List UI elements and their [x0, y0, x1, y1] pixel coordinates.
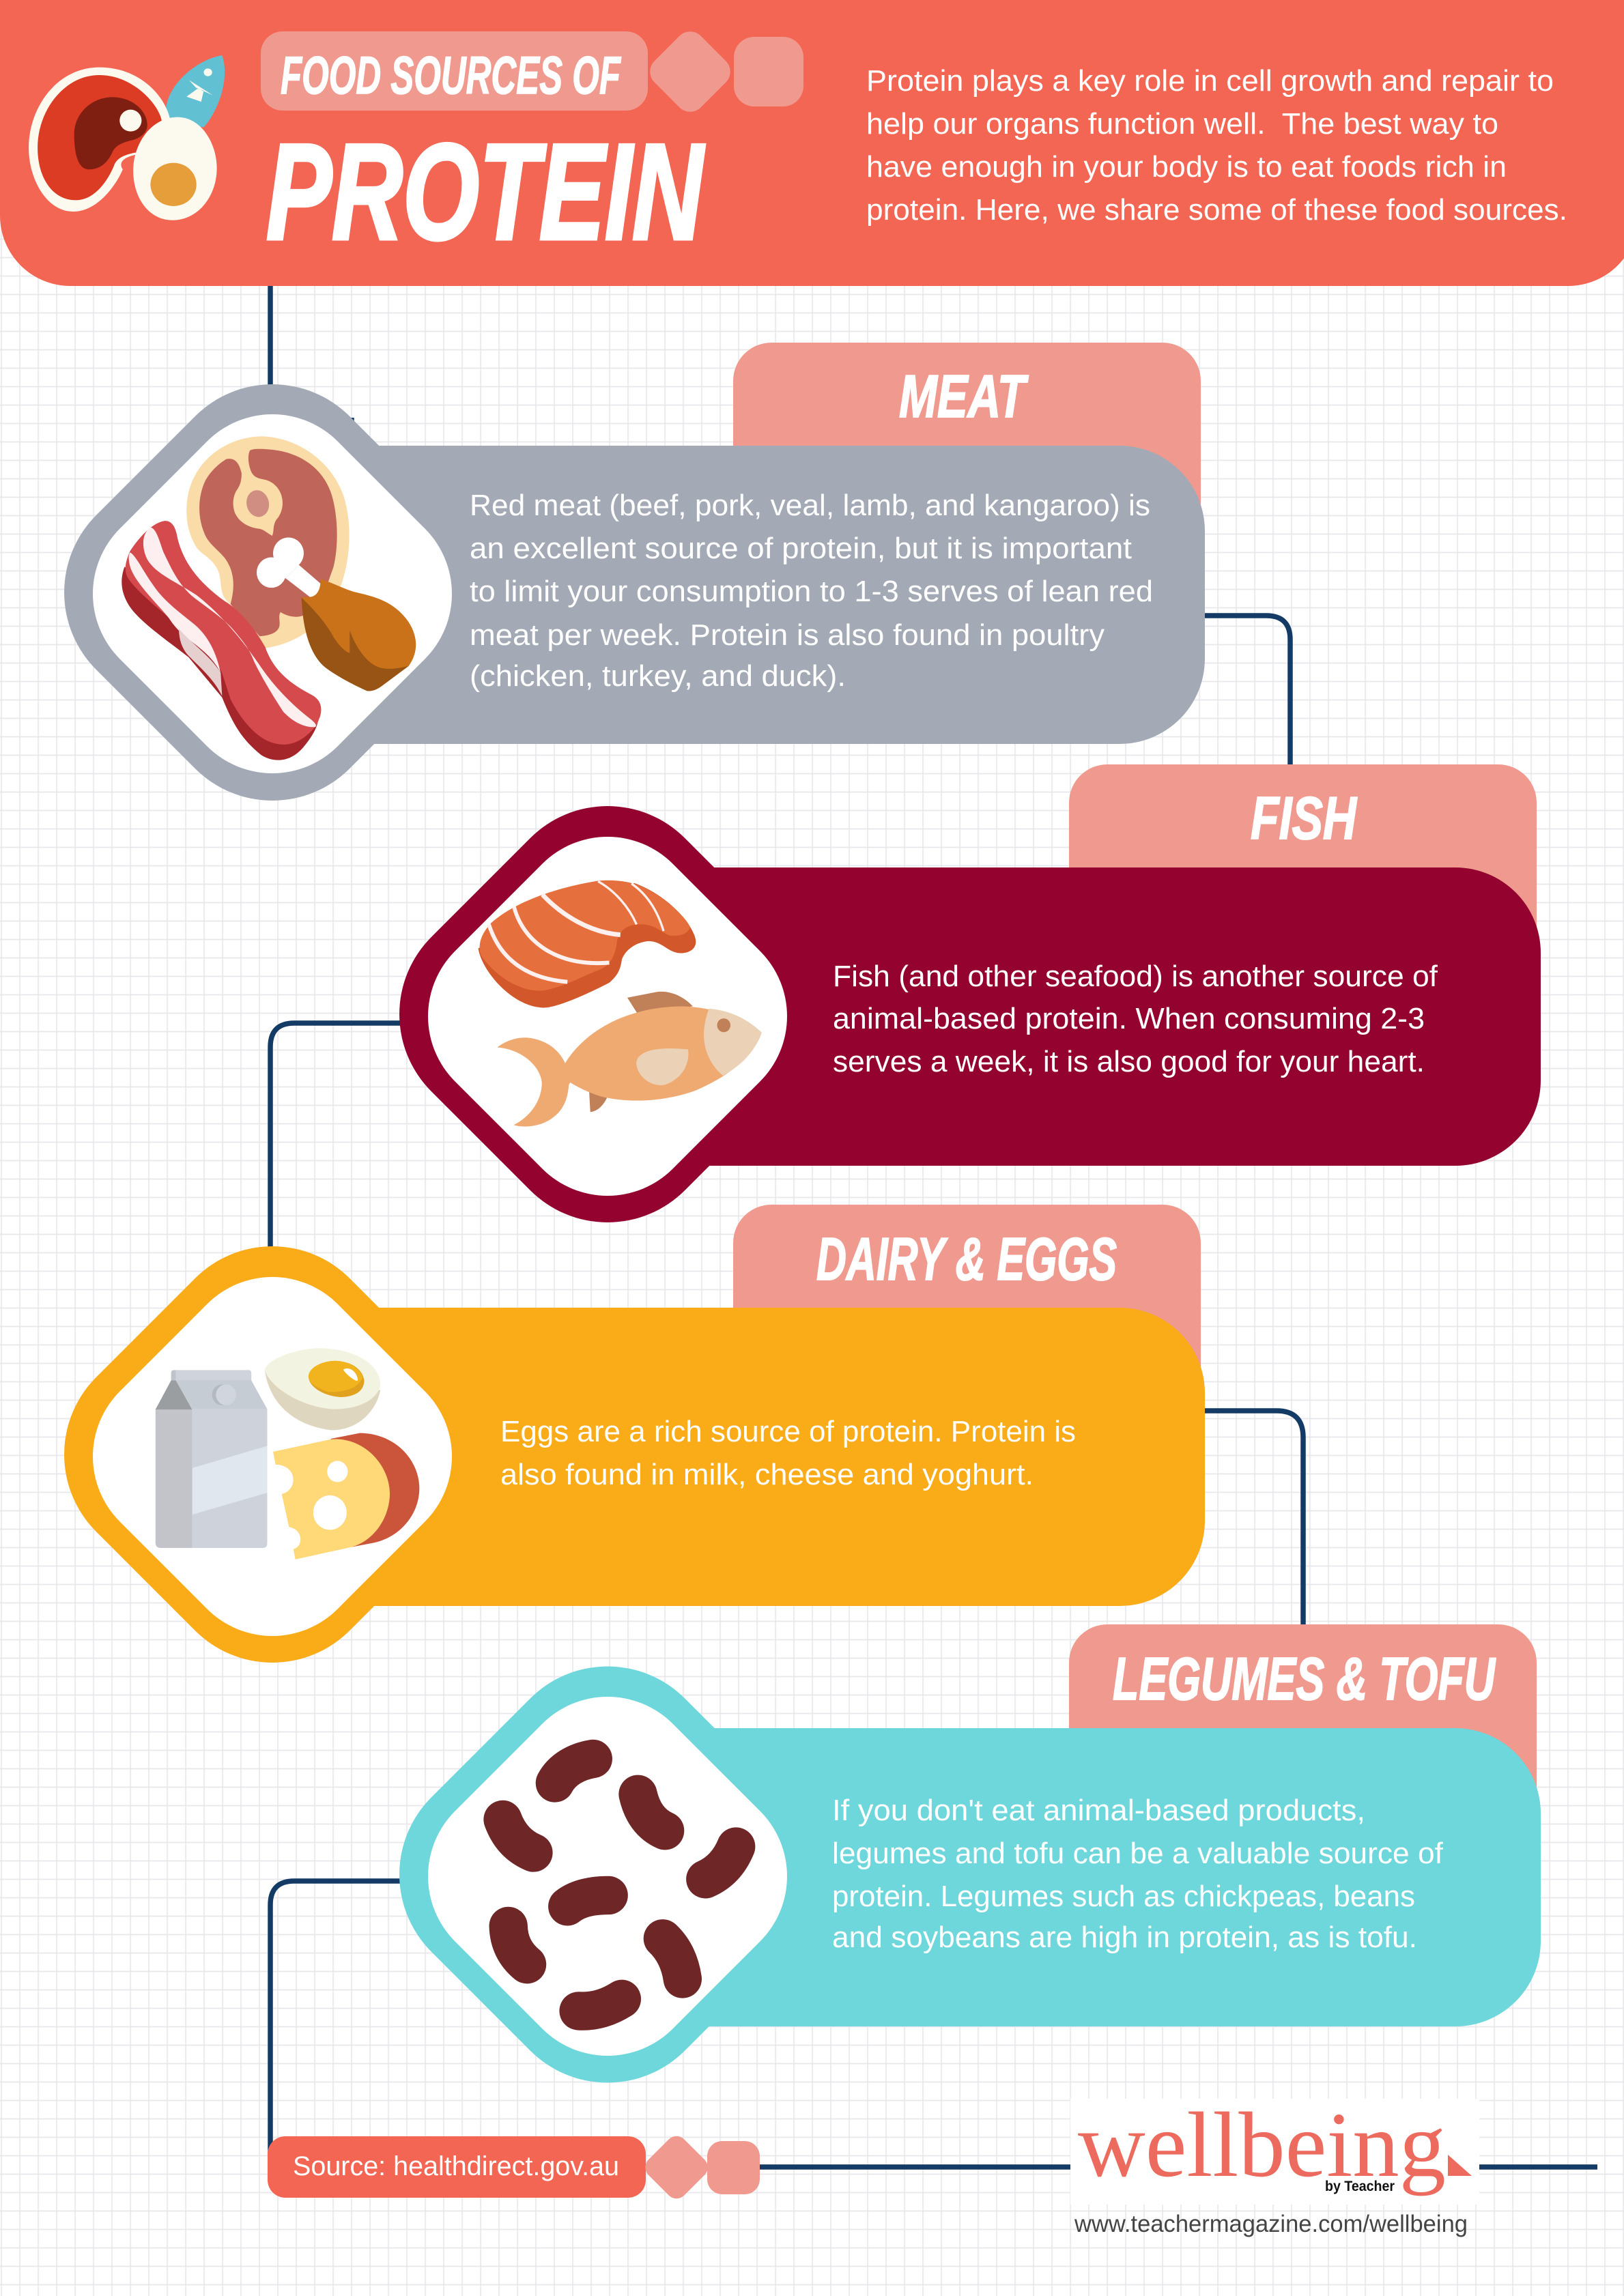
legumes body text: and soybeans are high in protein, as is tofu.	[832, 1921, 1417, 1954]
meat body text: to limit your consumption to 1-3 serves of lean red	[470, 575, 1153, 608]
logo: wellbeing by Teacher: wellbeing	[1078, 2094, 1446, 2196]
icon: beans	[503, 1759, 736, 2011]
fish body text	[833, 960, 1438, 1078]
dairy card	[273, 1308, 1205, 1606]
title label: food sources of: FOOD SOURCES OF	[281, 45, 622, 105]
intro text: protein. Here, we share some of these food sources.	[866, 193, 1567, 227]
legumes body text	[832, 1794, 1444, 1954]
dairy body text	[500, 1415, 1076, 1491]
fish diamond frame	[354, 761, 861, 1267]
source label	[268, 2136, 646, 2198]
tab: fish heading: FISH	[1251, 784, 1358, 852]
dairy diamond frame	[19, 1201, 526, 1708]
legumes body text: legumes and tofu can be a valuable source of	[832, 1837, 1444, 1870]
fish body text: animal-based protein. When consuming 2-3	[833, 1002, 1425, 1035]
tab: dairy heading: DAIRY & EGGS	[816, 1225, 1117, 1293]
source label: Source: healthdirect.gov.au	[293, 2151, 619, 2181]
tab: dairy heading	[733, 1205, 1201, 1423]
connector lines	[270, 280, 1597, 2167]
meat body text: (chicken, turkey, and duck).	[470, 659, 846, 693]
logo: wellbeing by Teacher: by Teacher	[1325, 2179, 1395, 2194]
decorative diamond and square	[641, 2132, 760, 2203]
icon: steak, bacon and drumstick	[122, 436, 416, 760]
intro text: Protein plays a key role in cell growth and repair to	[866, 64, 1554, 98]
icon: salmon fillet and fish	[479, 880, 762, 1127]
title: protein: PROTEIN	[266, 116, 705, 268]
intro text: have enough in your body is to eat foods rich in	[866, 150, 1507, 184]
legumes body text: If you don't eat animal-based products,	[832, 1794, 1365, 1827]
panel: legumes and tofu	[354, 1621, 1541, 2128]
header banner	[0, 0, 1624, 286]
intro text: help our organs function well. The best way to	[866, 107, 1498, 141]
panel: fish	[354, 761, 1541, 1267]
fish body text: serves a week, it is also good for your heart.	[833, 1045, 1425, 1078]
tab: legumes heading	[1069, 1624, 1537, 1843]
website address: www.teachermagazine.com/wellbeing	[1074, 2211, 1468, 2237]
fish body text: Fish (and other seafood) is another source of	[833, 960, 1438, 993]
fish card	[608, 867, 1541, 1166]
dairy body text: Eggs are a rich source of protein. Protein is	[500, 1415, 1076, 1448]
meat body text: Red meat (beef, pork, veal, lamb, and kangaroo) is	[470, 489, 1150, 522]
decorative diamond and square	[644, 25, 803, 118]
icon: steak, fish and egg	[29, 55, 225, 220]
icon: milk, egg and cheese	[156, 1348, 419, 1560]
legumes diamond frame	[354, 1621, 861, 2128]
meat body text	[470, 489, 1153, 693]
tab: meat heading	[733, 343, 1201, 561]
dairy body text: also found in milk, cheese and yoghurt.	[500, 1458, 1034, 1491]
intro text	[866, 64, 1567, 227]
panel: dairy and eggs	[19, 1201, 1205, 1708]
tab: meat heading: MEAT	[899, 362, 1029, 430]
legumes card	[608, 1728, 1541, 2026]
panel: meat	[19, 339, 1205, 846]
legumes body text: protein. Legumes such as chickpeas, beans	[832, 1880, 1415, 1913]
meat card	[273, 446, 1205, 744]
meat body text: meat per week. Protein is also found in poultry	[470, 618, 1105, 652]
meat body text: an excellent source of protein, but it is important	[470, 532, 1132, 565]
meat diamond frame	[19, 339, 526, 846]
title label: food sources of	[261, 31, 648, 111]
tab: fish heading	[1069, 764, 1537, 983]
